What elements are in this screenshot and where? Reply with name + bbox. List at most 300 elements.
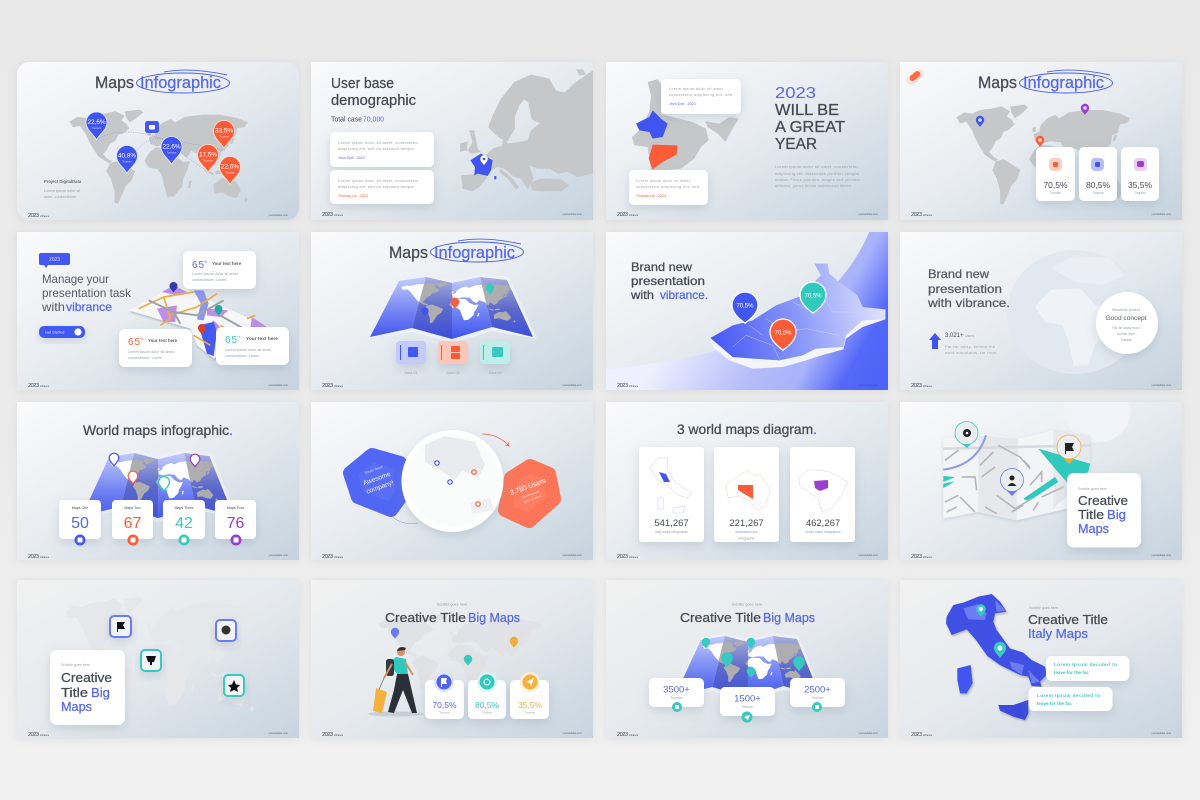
card top [661,79,741,114]
text card: Creative [61,670,112,685]
footer [617,553,878,560]
panel: slide 2 user base demographic [311,62,593,220]
bubble callout: Good concept [1106,315,1147,322]
heading [41,272,132,314]
card two [112,500,153,546]
footer: 2023 [911,732,922,738]
stat card 3: Tourism [1134,191,1146,195]
card 2500 [790,678,845,712]
stat card 2: Tourism [1092,191,1104,195]
folded map [79,450,237,522]
pin 3: Tourism [167,150,177,154]
heading: presentation task [42,286,132,300]
heading: with [630,288,654,302]
title: Infographic [1023,73,1104,92]
callout 1: leave for the far. [1054,670,1089,675]
arrow [482,434,509,446]
heading [630,260,708,302]
card 2500: 2500+ [804,684,831,696]
world map [70,110,248,204]
footer [322,212,582,218]
card four: Maps Four [227,506,245,510]
map pins [109,453,200,491]
footer: vibrance [334,385,344,388]
card bottom: Lorem ipsum dolor sit amet, [636,179,691,183]
isometric city map [129,285,269,359]
footer: yourwebsite.com [1152,553,1171,557]
city map [943,430,1090,520]
users stat: Far far away, behind the [945,345,995,349]
footer: yourwebsite.com [269,213,288,217]
card 2: Thomas Lie - 2023 [338,194,368,198]
card brazil [790,447,855,542]
pin 4: 33,5% [215,128,233,134]
pin 5 [198,144,218,172]
text card: Creative [1078,493,1128,508]
footer: yourwebsite.com [563,553,582,557]
card left [119,329,192,367]
button [39,326,85,338]
title: Big Maps [763,610,815,625]
card right: Lorem ipsum dolor sit amet, [225,348,272,352]
pin 2 [116,146,138,173]
footer [28,383,288,389]
pin 1: Tourism [92,126,102,130]
heading: WILL BE [775,102,839,119]
footer: vibrance [923,385,933,388]
footer: yourwebsite.com [269,383,288,387]
text card: Big [1107,507,1126,522]
footer: yourwebsite.com [563,212,582,216]
pins [976,104,1089,147]
title [978,70,1112,93]
stat card 2: 80,5% [475,700,499,710]
footer: vibrance [40,215,50,218]
callout 2: leave for the far. [1037,701,1072,706]
body text: Lorem ipsum dolor sit amet, consectetur [775,164,859,169]
total case: Total case [331,116,362,124]
footer: yourwebsite.com [563,731,582,735]
icon: location badge [145,121,159,133]
map: italy [946,594,1047,720]
footer: 2023 [617,212,628,218]
pin teal: 70,5% [804,294,822,300]
card top: Lorem ipsum dolor sit amet, [669,87,724,91]
footer: 2023 [322,212,333,218]
stat card 2: 80,5% [1086,180,1110,190]
heading: Manage your [42,272,109,286]
card brazil: 462,267 [806,518,840,529]
pin orange [770,319,796,350]
panel: slide 14 traveller [311,580,593,738]
card right [216,327,289,365]
card 1500: 1500+ [734,694,761,704]
card 1 [330,132,434,167]
card left: Your text here [148,338,178,343]
footer [28,553,288,560]
card 3500 [649,678,704,712]
panel: slide 11 three world maps [606,402,888,560]
area icon 1 [396,341,426,375]
card four [215,500,256,546]
total case: 70,000 [363,116,384,124]
panel: slide 1 maps infographic [17,62,299,220]
footer: yourwebsite.com [1152,731,1171,735]
card right: Your text here [246,336,278,342]
card three: 42 [175,515,193,532]
users stat [945,333,996,355]
globe markers [435,461,480,506]
project text: amet, consectetuer [44,195,77,199]
orange hexagon [505,466,554,521]
title: Infographic [434,243,515,262]
card left: 65 [128,337,140,348]
stat card 2 [468,672,506,719]
card three [163,500,205,546]
callout 2 [1028,687,1112,711]
connector curve [392,516,418,524]
footer: 2023 [911,212,922,218]
footer: vibrance [629,734,639,737]
card bottom: Thomas Lie - 2023 [636,194,666,198]
footer: vibrance [629,556,639,559]
area icon 1: Area 01 [404,371,418,375]
panel: slide 13 creative title world [17,580,299,738]
icon: up arrow [929,333,941,349]
heading [775,85,845,153]
card right: % [237,335,240,339]
footer: 2023 [911,383,922,389]
blue curved background [606,232,888,390]
panel: slide 3 will be a great year [606,62,888,220]
footer: vibrance [334,556,344,559]
card italy [639,447,704,542]
text card: Title [61,685,88,700]
card australia: 221,267 [729,518,764,529]
card 1: Lorem ipsum dolor sit amet, consectetur [338,140,419,145]
card 2500: Tourism [812,696,824,700]
pin 6: 22,6% [221,164,239,170]
text card: Subtitle goes here [61,663,90,667]
heading: vibrance [66,300,112,314]
title: Maps [978,73,1017,92]
region: orange [649,145,678,169]
card left: Lorem ipsum dolor sit amet, [128,350,175,354]
panel: slide 9 world maps infographic [17,402,299,560]
heading: YEAR [775,136,817,153]
icon: france pin [480,155,488,165]
heading: Brand new [928,267,989,281]
title [389,239,524,262]
footer: 2023 [28,383,39,389]
blue hexagon: company! [365,479,395,496]
panel: slide 12 creative title city map [900,402,1182,560]
area icon 2: Area 02 [446,371,460,375]
footer: 2023 [322,732,333,738]
footer [322,383,582,389]
panel: slide 16 italy maps [900,580,1182,738]
footer: yourwebsite.com [1152,383,1171,387]
world map [956,105,1130,205]
stat card 1: 70,5% [432,700,457,710]
pale circle [1064,402,1131,443]
footer: vibrance [40,734,50,737]
footer [322,731,582,738]
subtitle: Subtitle goes here [1029,606,1058,610]
card 1500: Tourism [742,705,754,709]
title: Creative Title [385,610,466,625]
panel: slide 7 3d map on blue curve [606,232,888,390]
footer: yourwebsite.com [269,731,288,735]
stat card 1: Tourism [1050,191,1061,195]
bubble callout: Vokalia [1121,338,1132,342]
stat card 3 [1121,147,1159,201]
area icon 2 [438,341,468,375]
footer: yourwebsite.com [269,553,288,557]
footer [617,731,878,738]
card right: consectetuer. Lorem [225,354,259,358]
title: Creative Title [680,610,761,625]
card 3500: Tourism [671,696,683,700]
footer: vibrance [923,214,933,217]
bubble callout: Far far away word [1112,326,1140,330]
route lines [96,132,225,172]
stat card 3: 35,5% [1128,180,1152,190]
card bottom: consectetur adipiscing elit, sed [636,185,699,189]
map pins [421,284,494,317]
card italy: 541,267 [654,518,689,529]
footer [911,731,1171,738]
text card: Title [1078,507,1104,522]
pin 4: Tourism [219,134,230,138]
badge 2023 [39,253,70,268]
footer [911,553,1171,560]
region: blue [636,110,668,139]
card left: % [140,337,143,341]
pin teal [800,282,826,313]
globe [402,430,504,532]
footer [911,383,1171,389]
pin orange: 70,5% [774,330,792,336]
map pins [391,628,518,666]
pin 2: Tourism [122,160,133,164]
icon pin star [224,675,244,696]
bubble callout: Worldwide product [1112,308,1140,312]
pin 1: 22,6% [87,119,106,126]
title: Maps [389,243,428,262]
bubble callout [1096,292,1158,354]
footer: vibrance [629,214,639,217]
footer: yourwebsite.com [563,383,582,387]
footer [322,553,582,560]
card top: Your text here [212,261,242,266]
footer: vibrance [923,556,933,559]
pin 3 [161,136,182,164]
icon: pill [906,68,924,86]
card right: 65 [225,335,237,346]
area icon 3 [480,341,510,375]
stat card 3: 35,5% [518,700,542,710]
pin 2: 40,8% [118,152,136,160]
card bottom [629,170,708,205]
panel: slide 6 folded map [311,232,593,390]
body text: adipiscing elit. Maecenas porttitor congue [775,171,860,176]
orange hexagon: 3,780 Users [509,477,547,497]
title [385,610,520,625]
card 2 [330,170,434,204]
footer: 2023 [28,554,39,560]
pin 6: Tourism [225,170,236,174]
title: Big Maps [468,610,520,625]
orange hexagon: Lorem ipsum [521,489,540,499]
footer [28,731,288,738]
footer: vibrance [923,734,933,737]
text card: Big [91,685,110,700]
stat card 2: Tourism [482,710,493,714]
body text: ultricies, purus lectus malesuada libero. [775,183,852,188]
title [95,70,230,93]
traveller illustration [368,647,424,716]
stat card 3: Tourism [525,710,536,714]
pin 6 [220,156,240,184]
footer: vibrance [40,385,50,388]
folded map [672,633,824,702]
text card [50,650,125,725]
pin person [1000,468,1024,496]
pin 5: Tourism [203,158,214,162]
card three: Maps Three [174,506,194,510]
stat card 1 [1036,147,1075,201]
footer [617,383,878,389]
heading: 2023 [775,85,816,102]
panel: slide 4 maps with stats [900,62,1182,220]
bubble callout: and far from [1117,332,1135,336]
footer: yourwebsite.com [1152,212,1171,216]
card top: % [204,260,207,264]
title [331,76,416,109]
card top: consectetuer. Lorem [192,278,226,282]
stat card 3 [510,672,549,719]
text card: Maps [1078,521,1109,536]
stat card 1: Tourism [439,710,450,714]
title: demographic [331,93,416,109]
card top: Lorem ipsum dolor sit amet, [192,272,239,276]
faint world map [65,597,254,714]
title: World maps infographic. [83,422,233,438]
subtitle: Subtitle goes here [437,602,467,606]
card one: 50 [71,515,89,532]
card 3500: 3500+ [663,684,690,696]
blue hexagon [350,455,402,510]
map: india grey [632,79,739,170]
pin 1 [86,112,107,140]
card one [59,500,101,546]
icon pin globe [216,620,236,641]
footer: yourwebsite.com [859,212,878,216]
heading: with [41,300,65,314]
card 2: adipiscing elit, sed do eiusmod tempor [338,184,415,189]
pin 5: 17,5% [199,152,217,158]
footer: 2023 [911,554,922,560]
subtitle: Subtitle goes here [732,602,762,606]
faint world map [378,614,543,690]
pin blue [732,292,758,323]
footer: 2023 [28,213,39,219]
panel: slide 5 manage your presentation [17,232,299,390]
stat card 1: 70,5% [1043,180,1068,190]
globe [1007,250,1143,374]
footer [911,212,1171,218]
card one: Maps One [72,506,88,510]
card 1: Jhon Doe - 2023 [338,156,365,160]
footer: 2023 [322,554,333,560]
footer: 2023 [617,383,628,389]
card 2: Lorem ipsum dolor sit amet, consectetur [338,178,419,183]
footer: vibrance [629,385,639,388]
text card: Maps [61,699,92,714]
text card: Subtitle goes here [1078,487,1107,491]
card 1500 [720,687,775,722]
project text: Project DigitalData [44,179,82,184]
card australia [714,447,779,542]
project text [44,179,82,199]
map: france [470,154,496,179]
footer [617,212,878,218]
button: Get Started [45,330,64,334]
heading: presentation [631,274,705,288]
panel: slide 15 big maps [606,580,888,738]
footer: yourwebsite.com [859,383,878,387]
footer: 2023 [617,554,628,560]
title: Maps [95,73,134,92]
pin gear [955,422,978,448]
heading: vibrance. [660,288,708,302]
callout 2: Lorem Ipsum decided to [1037,693,1100,698]
heading: presentation [928,282,1002,296]
title: 3 world maps diagram. [677,421,817,437]
footer: 2023 [322,383,333,389]
body text: massa. Fusce posuere, magna sed pulvinar [775,177,861,182]
pin flag [1057,435,1081,464]
title: User base [331,76,394,92]
stat card 1 [425,672,464,719]
footer: vibrance [40,556,50,559]
pin 3: 22,6% [162,144,181,150]
footer: yourwebsite.com [859,731,878,735]
orange hexagon: dolor sit amet [523,494,542,504]
users stat: 3.021+ [945,333,964,339]
title [680,610,815,625]
stat card 2 [1079,147,1117,201]
folded world map [367,274,537,343]
3d map [710,264,885,369]
heading: with vibrance. [927,296,1010,310]
card top: Jhon Doe - 2023 [669,102,696,106]
card top: 65 [192,260,204,271]
heading: A GREAT [775,119,845,136]
map pins [170,282,222,335]
area icon 3: Area 03 [488,371,502,375]
card australia: Australia maps [735,530,758,534]
icon pin trophy [141,650,161,671]
blue hexagon: Awesome [362,471,392,487]
card 1: adipiscing elit, sed do eiusmod tempor [338,146,415,151]
footer: yourwebsite.com [859,553,878,557]
title: Italy Maps [1028,626,1088,641]
footer: 2023 [617,732,628,738]
heading: Brand new [631,260,692,274]
callout 1: Lorem Ipsum decided to [1054,662,1117,667]
